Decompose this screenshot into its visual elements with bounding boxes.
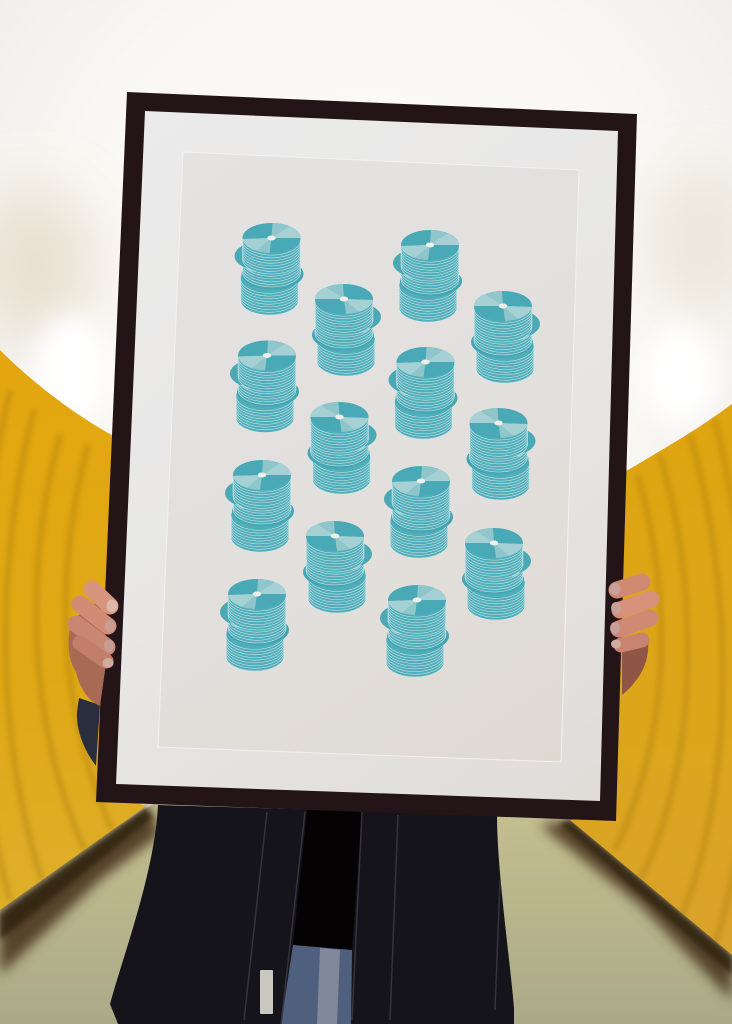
CD stack 13	[220, 579, 289, 671]
jacket seams	[244, 812, 500, 1024]
left sleeve	[77, 698, 100, 766]
CD stack 14	[380, 585, 449, 677]
CD stack 10	[303, 521, 372, 613]
CD stacks	[220, 223, 540, 677]
right hand	[610, 582, 651, 695]
CD stack 4	[471, 291, 540, 383]
print area	[158, 152, 579, 762]
mat board	[116, 111, 618, 801]
dark shirt	[293, 810, 362, 950]
left hand	[69, 589, 118, 706]
jacket	[110, 805, 514, 1024]
person: jacket and jeans	[110, 805, 514, 1024]
CD stack 3	[393, 230, 462, 322]
clothing tag	[260, 970, 273, 1014]
floor	[0, 800, 732, 1024]
CD stack 2	[312, 284, 381, 376]
left yellow wall	[0, 350, 146, 910]
CD stack 7	[388, 347, 458, 439]
CD stack 6	[308, 402, 376, 494]
CD stack 1	[234, 223, 304, 315]
CD stack 8	[466, 408, 536, 500]
poster frame	[96, 92, 637, 821]
CD stack 5	[230, 340, 299, 432]
jeans	[281, 945, 352, 1024]
right yellow wall	[570, 404, 732, 955]
CD stack 11	[384, 466, 453, 558]
CD stack 12	[462, 528, 531, 620]
CD stack 9	[225, 460, 294, 552]
